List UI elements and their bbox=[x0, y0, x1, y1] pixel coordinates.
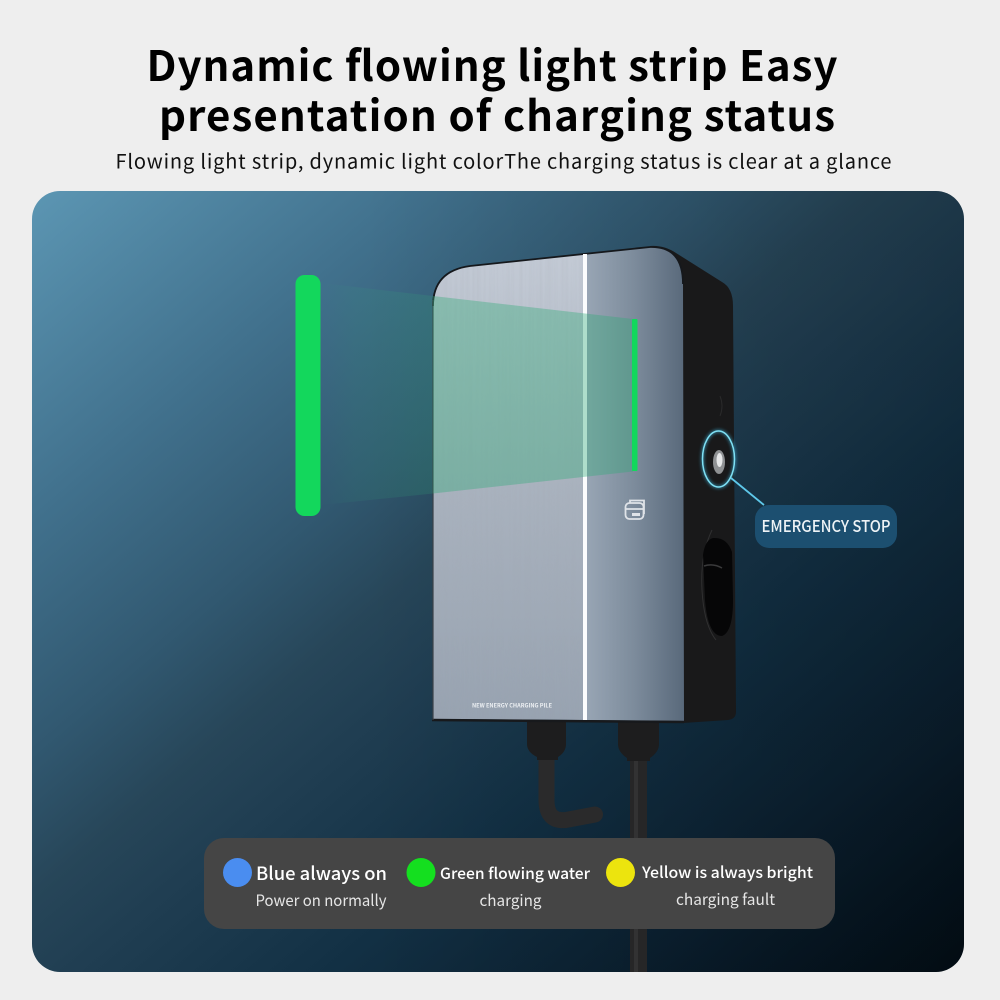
legend: blue bbox=[223, 858, 387, 911]
enlarged green light strip bbox=[296, 275, 320, 516]
callout connector line bbox=[731, 478, 764, 505]
green light beam over device face bbox=[433, 296, 633, 494]
legend: blue: Power on normally bbox=[256, 889, 386, 911]
title: Dynamic flowing light strip Easy bbox=[146, 33, 838, 94]
bottom edge bbox=[432, 720, 684, 722]
icon: right cable gland bbox=[618, 722, 659, 761]
icon: left cable gland bbox=[527, 722, 566, 760]
icon: short bent cable bbox=[546, 760, 595, 820]
callout: emergency stop: EMERGENCY STOP bbox=[762, 513, 890, 537]
front face right bbox=[583, 247, 684, 721]
brand label: NEW ENERGY CHARGING PILE bbox=[472, 702, 553, 710]
legend: yellow: Yellow is always bright bbox=[641, 861, 813, 883]
brushed metal texture bbox=[433, 254, 583, 720]
green light beam over background bbox=[321, 283, 433, 505]
icon: power cable running down behind legend bbox=[630, 755, 647, 972]
title: presentation of charging status bbox=[159, 83, 835, 144]
legend: blue: Blue always on bbox=[256, 860, 387, 886]
top edge bbox=[433, 247, 683, 306]
legend panel bbox=[204, 838, 835, 929]
legend: green: charging bbox=[480, 889, 542, 911]
panel: dark blue gradient background bbox=[32, 191, 964, 972]
light divider bbox=[583, 254, 587, 720]
green strip on device bbox=[632, 319, 638, 471]
subtitle: Flowing light strip, dynamic light colorThe charging status is clear at a glance bbox=[116, 146, 892, 174]
front face left bbox=[433, 254, 583, 720]
left edge bbox=[432, 300, 434, 720]
card reader icon bbox=[626, 500, 644, 519]
legend: green bbox=[406, 858, 591, 911]
charger device bbox=[432, 246, 736, 723]
socket recess bbox=[702, 530, 733, 640]
legend: yellow: charging fault bbox=[676, 888, 775, 910]
legend: yellow bbox=[606, 858, 813, 910]
side housing bbox=[650, 246, 736, 723]
callout: emergency stop bbox=[755, 505, 897, 548]
title bbox=[146, 33, 838, 144]
emergency stop button bbox=[702, 431, 734, 487]
side seam bbox=[720, 396, 722, 416]
legend: green: Green flowing water bbox=[440, 862, 591, 884]
